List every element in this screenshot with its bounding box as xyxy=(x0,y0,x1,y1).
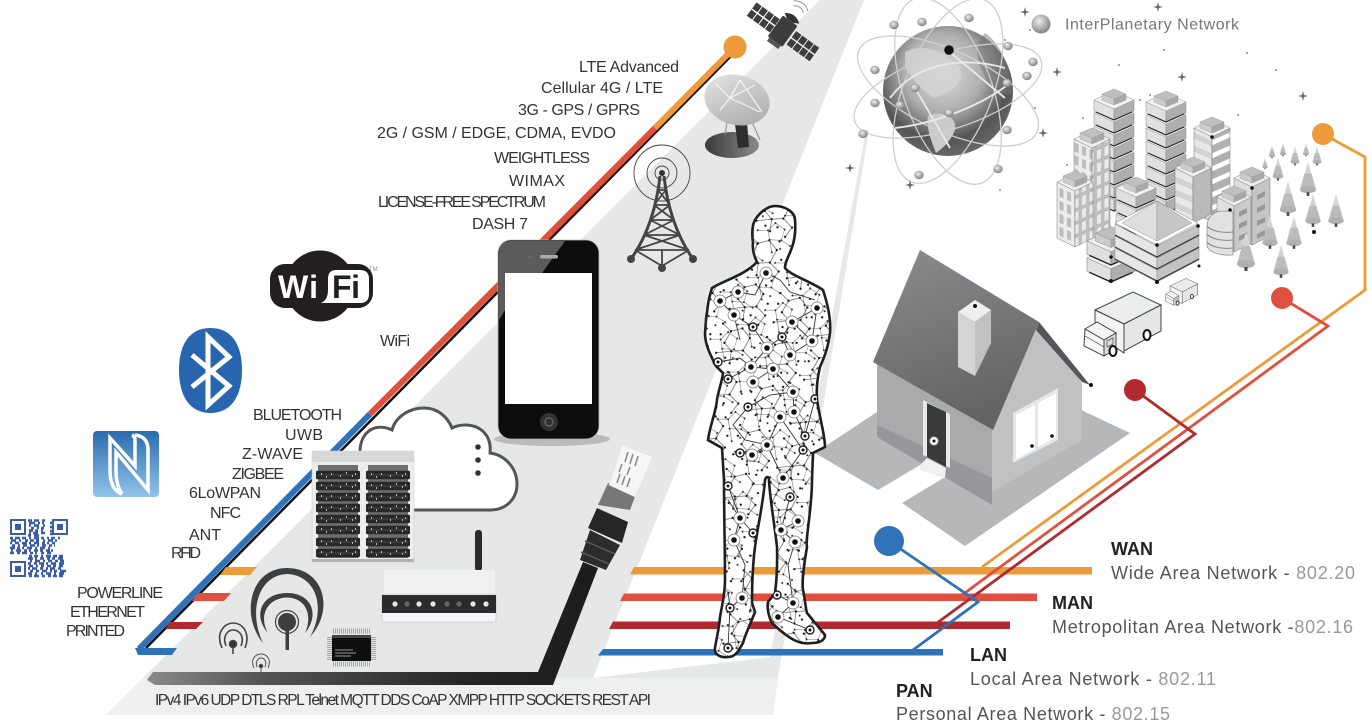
wireless technology labels: LTE Advanced xyxy=(579,59,679,76)
icon: Wi-Fi router xyxy=(382,530,496,622)
background: grey network wedge xyxy=(106,0,869,715)
LAN label: Local Area Network - 802.11 xyxy=(970,669,1216,689)
building L xyxy=(1234,167,1270,245)
icon: satellite dish xyxy=(699,68,775,158)
wireless technology labels: ANT xyxy=(189,527,221,544)
network bars xyxy=(598,567,1092,656)
planet and InterPlanetary label: InterPlanetary Network xyxy=(1065,16,1240,34)
PAN label xyxy=(896,681,1170,721)
icon: QR code xyxy=(10,520,67,576)
city xyxy=(1057,89,1344,284)
wireless technology labels: DASH 7 xyxy=(472,216,528,233)
wireless technology labels: Cellular 4G / LTE xyxy=(541,80,663,97)
building C xyxy=(1194,117,1230,222)
icon: NFC logo xyxy=(93,431,159,497)
icon: cloud xyxy=(360,408,517,510)
decorative stars xyxy=(845,2,1308,190)
icon: small wireless signal xyxy=(220,623,247,654)
door xyxy=(920,400,950,478)
wireless technology labels: UWB xyxy=(285,427,323,444)
PAN label: PAN xyxy=(896,681,933,701)
building K xyxy=(1217,186,1251,252)
wireless technology labels: NFC xyxy=(210,505,241,522)
building E xyxy=(1057,171,1093,247)
wireless technology labels: BLUETOOTH xyxy=(253,407,342,424)
wireless technology labels: WEIGHTLESS xyxy=(494,150,590,167)
wireless technology labels: PRINTED xyxy=(66,623,125,640)
wireless technology labels xyxy=(66,59,679,640)
MAN label: Metropolitan Area Network -802.16 xyxy=(1052,617,1353,637)
ethernet cable xyxy=(147,445,653,685)
building G xyxy=(1175,157,1211,223)
icon: large wireless signal xyxy=(251,568,323,650)
protocol list: IPv4 IPv6 UDP DTLS RPL Telnet MQTT DDS CoAP XMPP HTTP SOCKETS REST API xyxy=(155,692,651,709)
wireless technology labels: 3G - GPS / GPRS xyxy=(518,102,640,119)
WAN label: Wide Area Network - 802.20 xyxy=(1111,563,1355,583)
low block I xyxy=(1087,227,1135,283)
wireless technology labels: WiFi xyxy=(380,333,410,350)
wide-area connector lines xyxy=(874,123,1365,650)
round building J xyxy=(1207,211,1233,255)
building D xyxy=(1074,128,1110,240)
icon: satellite xyxy=(742,0,835,68)
wireless technology labels: ETHERNET xyxy=(70,604,145,621)
icon: Wi-Fi logo: TM xyxy=(369,267,378,273)
wireless technology labels: Z-WAVE xyxy=(242,446,303,463)
tower A xyxy=(1094,89,1134,211)
icon: microchip xyxy=(330,631,374,664)
wireless technology labels: 6LoWPAN xyxy=(189,485,261,502)
house xyxy=(873,250,1093,505)
icon: Bluetooth logo xyxy=(179,328,242,413)
wireless technology labels: WIMAX xyxy=(509,173,565,190)
icon: server rack xyxy=(312,451,414,562)
tower B xyxy=(1146,91,1186,213)
window xyxy=(1013,383,1093,463)
icon: cell tower xyxy=(627,145,697,272)
icon: Wi-Fi logo: Wi xyxy=(278,269,318,305)
LAN label xyxy=(970,645,1216,689)
MAN label: MAN xyxy=(1052,593,1093,613)
LAN label: LAN xyxy=(970,645,1007,665)
diagonal wireless backbone line xyxy=(139,36,746,649)
pyramid building H xyxy=(1115,201,1201,284)
wireless technology labels: LICENSE-FREE SPECTRUM xyxy=(378,194,546,211)
wireless technology labels: ZIGBEE xyxy=(232,466,284,483)
WAN label xyxy=(1111,539,1355,583)
MAN label xyxy=(1052,593,1353,637)
building F xyxy=(1116,177,1156,234)
chimney xyxy=(958,300,991,376)
icon: large delivery truck xyxy=(1084,292,1161,356)
wireless technology labels: RFID xyxy=(171,545,201,562)
icon: Wi-Fi logo: Fi xyxy=(332,269,360,305)
person silhouette with network xyxy=(704,204,832,658)
icon: tiny wireless signal xyxy=(253,654,269,672)
icon: globe with orbits xyxy=(842,0,1054,198)
trees xyxy=(1237,143,1344,278)
wireless technology labels: POWERLINE xyxy=(77,585,163,602)
icon: small delivery truck xyxy=(1165,278,1198,305)
icon: Wi-Fi logo xyxy=(270,250,378,322)
WAN label: WAN xyxy=(1111,539,1153,559)
wireless technology labels: 2G / GSM / EDGE, CDMA, EVDO xyxy=(377,125,616,142)
icon: smartphone xyxy=(494,240,610,446)
left wired stubs xyxy=(135,567,257,655)
house ground xyxy=(815,400,1130,546)
